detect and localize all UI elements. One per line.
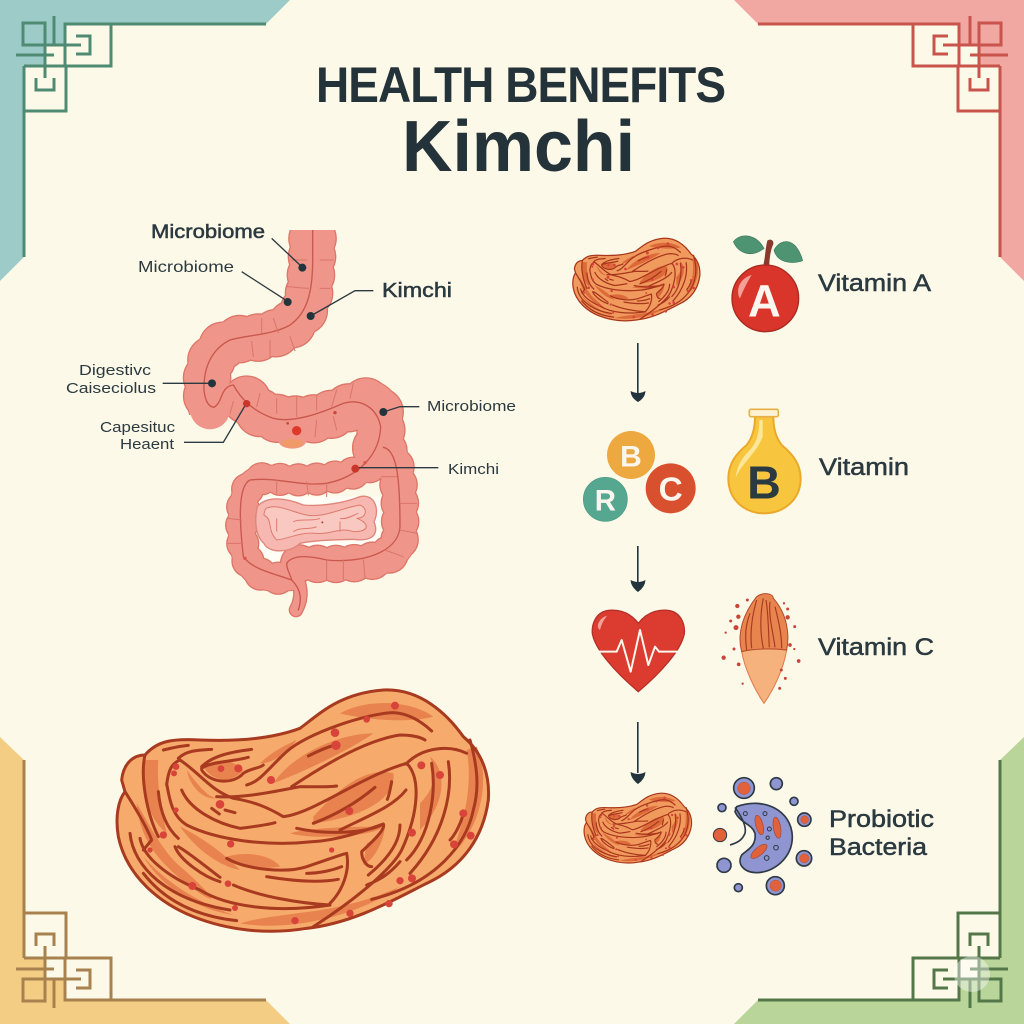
- callout labels: Microbiome: [138, 259, 234, 276]
- row 2: vitamin B C R circles: [583, 431, 696, 521]
- row 2: vitamin B bottle icon: B: [747, 456, 781, 508]
- row 4: probiotic bacteria label: Bacteria: [829, 834, 928, 861]
- large kimchi illustration: [117, 690, 489, 931]
- panel: digestive tract diagram: [66, 220, 516, 610]
- title: HEALTH BENEFITS: [316, 57, 726, 113]
- row 4: probiotic bacteria label: Probiotic: [829, 806, 934, 833]
- title: [316, 57, 726, 187]
- row 1: vitamin A apple icon: A: [748, 276, 781, 327]
- row 3: vitamin C label: Vitamin C: [818, 634, 934, 661]
- intestine illustration: [190, 220, 417, 610]
- callout leader lines: [163, 238, 438, 473]
- callout labels: [66, 222, 516, 478]
- callout labels: Heaent: [120, 436, 175, 453]
- watermark badge: [954, 956, 990, 992]
- bumps and outlines: [207, 220, 400, 578]
- row 2: vitamin B C R circles: C: [659, 472, 683, 509]
- callout labels: Microbiome: [427, 398, 516, 415]
- centre line and folds: [204, 230, 400, 610]
- row 1: vitamin A apple icon: [732, 236, 803, 332]
- callout labels: Microbiome: [151, 222, 265, 243]
- corner: bottom left orange: [0, 737, 290, 1024]
- callout labels: Digestivc: [79, 362, 152, 379]
- small intestine: [256, 496, 376, 551]
- arrow 1: [630, 343, 646, 402]
- row 2: vitamin B C R circles: R: [595, 485, 616, 518]
- corner: top left teal: [0, 0, 290, 281]
- row 3: kimchi cone icon: [722, 594, 800, 703]
- arrow 3: [630, 722, 646, 784]
- row 2: vitamin B C R circles: B: [620, 441, 642, 474]
- callout labels: Kimchi: [382, 280, 452, 302]
- corner: top right red: [734, 0, 1024, 281]
- row 2: vitamin label: Vitamin: [819, 454, 909, 481]
- row 3: heart icon: [592, 610, 684, 692]
- callout labels: Caiseciolus: [66, 380, 156, 397]
- row 2: vitamin B bottle icon: [728, 409, 801, 513]
- title: Kimchi: [402, 107, 635, 187]
- row 4: probiotic bacteria icon: [713, 778, 812, 895]
- panel: benefit flow: [573, 236, 934, 895]
- callout labels: Kimchi: [448, 461, 499, 478]
- arrow 2: [630, 546, 646, 592]
- callout labels: Capesituc: [100, 419, 176, 436]
- row 1: kimchi icon: [573, 238, 700, 321]
- row 4: probiotic bacteria label: [829, 806, 934, 861]
- corner: bottom right green: [734, 737, 1024, 1024]
- row 4: kimchi icon: [584, 793, 692, 863]
- row 1: vitamin A label: Vitamin A: [818, 270, 931, 297]
